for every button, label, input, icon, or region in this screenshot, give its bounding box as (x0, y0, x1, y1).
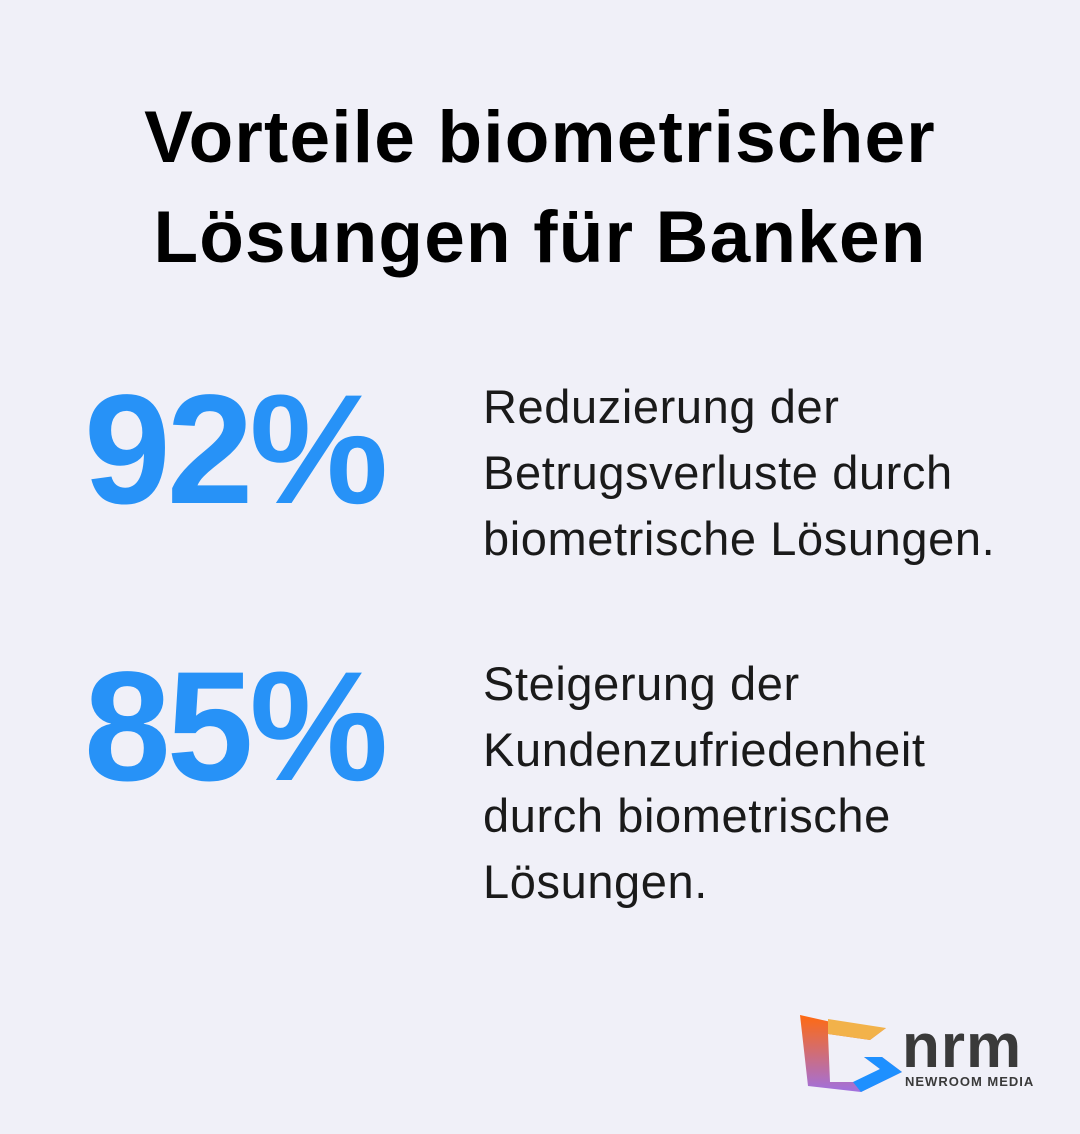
stat: 85%: 85% (84, 640, 384, 814)
text: stat 2 description: durch biometrische (483, 789, 891, 842)
text: stat 2 description: Lösungen. (483, 855, 708, 908)
title: Vorteile biometrischer (144, 97, 936, 178)
logo (800, 1012, 1034, 1092)
title (144, 97, 936, 278)
text: stat 2 description: Kundenzufriedenheit (483, 723, 926, 776)
text: stat 1 description (483, 380, 995, 565)
text: stat 1 description: Reduzierung der (483, 380, 840, 433)
text: stat 2 description: Steigerung der (483, 657, 800, 710)
stat: 92%: 92% (84, 363, 384, 537)
text: stat 1 description: biometrische Lösungen. (483, 512, 995, 565)
logo: NEWROOM MEDIA (905, 1074, 1034, 1089)
text: stat 2 description (483, 657, 926, 908)
text: stat 1 description: Betrugsverluste durch (483, 446, 953, 499)
title: Lösungen für Banken (153, 197, 927, 278)
logo: nrm (902, 1012, 1022, 1081)
